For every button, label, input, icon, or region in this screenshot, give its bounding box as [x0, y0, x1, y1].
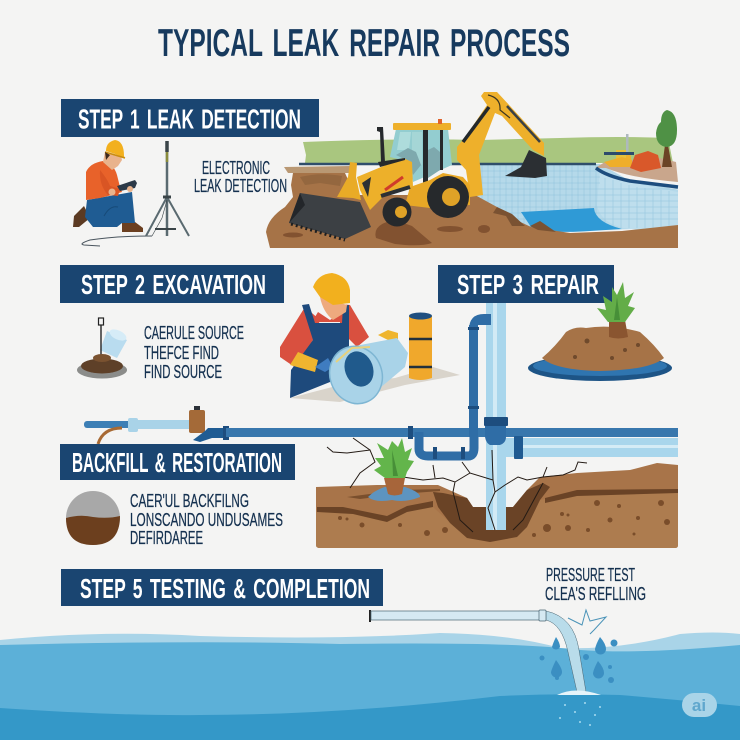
- text: caerule source: FIND SOURCE: [144, 362, 222, 382]
- panel: step 2 heading: STEP 2 EXCAVATION: [81, 269, 266, 300]
- body: [357, 158, 413, 210]
- icon: soil cross-section circle: [66, 491, 120, 545]
- plant: [368, 487, 420, 501]
- text: electronic leak detection: ELECTRONIC: [202, 158, 270, 178]
- trench: [433, 483, 550, 542]
- light vertical: [486, 303, 506, 530]
- bucket: [289, 193, 371, 239]
- exhaust: [377, 127, 385, 162]
- text: electronic leak detection: [194, 158, 287, 196]
- deck: [595, 158, 678, 182]
- wheels: [427, 176, 469, 218]
- badge: ai: [682, 693, 717, 717]
- excavator arm: [457, 92, 544, 197]
- main horizontal: [226, 428, 678, 437]
- cylinder: [409, 316, 432, 380]
- tee fitting: [484, 417, 508, 426]
- panel: backfill heading: [60, 444, 295, 480]
- panel: backfill heading: BACKFILL & RESTORATION: [72, 447, 282, 478]
- left pipe: [84, 421, 136, 428]
- panel: step 2 heading: [60, 265, 284, 303]
- text: caerule source: CAERULE SOURCE: [144, 323, 244, 343]
- panel: step 5 heading: [61, 569, 383, 606]
- shadow: [290, 367, 460, 402]
- stripe: [385, 177, 403, 190]
- dirt: [266, 173, 678, 248]
- pool equipment: [626, 134, 628, 154]
- icon: pipe and valve on manhole: [77, 318, 128, 378]
- apron: [290, 304, 349, 398]
- text: pressure test: [545, 565, 646, 604]
- diagram: pipe network: [84, 303, 678, 530]
- text: pressure test: PRESSURE TEST: [546, 565, 635, 585]
- light horizontal: [506, 438, 678, 457]
- text: pressure test: CLEA'S REFLLING: [545, 584, 646, 604]
- text: careful backfilling: CAER'UL BACKFILNG: [130, 491, 249, 511]
- pipe section: [345, 338, 408, 403]
- tree: [656, 110, 677, 167]
- text: caerule source: THEFCE FIND: [144, 343, 219, 363]
- pool: [476, 164, 678, 233]
- illustration: soil mound with plant on a blue base: [528, 282, 672, 381]
- panel: step 1 heading: STEP 1 LEAK DETECTION: [78, 104, 301, 134]
- text: caerule source: [144, 323, 244, 382]
- strata: [317, 501, 433, 522]
- text: careful backfilling: LONSCANDO UNDUSAMES: [130, 510, 283, 530]
- illustration: excavated trench with cracks: [316, 438, 678, 548]
- U trap: [419, 432, 474, 456]
- water background: [0, 632, 740, 740]
- blue vertical: [469, 325, 478, 437]
- illustration: test pipe with leak splash: [369, 610, 618, 726]
- grass: [303, 137, 673, 163]
- stone ledge: [284, 166, 350, 173]
- cracks: [327, 438, 587, 532]
- text: electronic leak detection: LEAK DETECTION: [194, 176, 287, 196]
- badge: ai: ai: [692, 696, 706, 715]
- water: [521, 208, 622, 232]
- panel: step 1 heading: [61, 99, 319, 137]
- coping line: [299, 163, 596, 165]
- head: [320, 297, 347, 320]
- panel: step 5 heading: STEP 5 TESTING & COMPLETION: [80, 573, 370, 604]
- cab: [390, 129, 452, 182]
- text: careful backfilling: [130, 491, 283, 548]
- gloves and hands: [290, 352, 318, 372]
- icon: kneeling worker with tablet: [73, 140, 152, 246]
- soil: [316, 463, 678, 548]
- illustration: backhoe at the pool: [266, 92, 678, 248]
- icon: detection tripod: [146, 141, 189, 236]
- arms: [280, 307, 320, 368]
- lift arm: [337, 162, 361, 200]
- panel: step 3 heading: STEP 3 REPAIR: [457, 269, 599, 300]
- illustration: worker repairing pipe: [280, 273, 460, 411]
- panel: step 3 heading: [438, 265, 614, 303]
- text: careful backfilling: DEFIRDAREE: [130, 528, 203, 548]
